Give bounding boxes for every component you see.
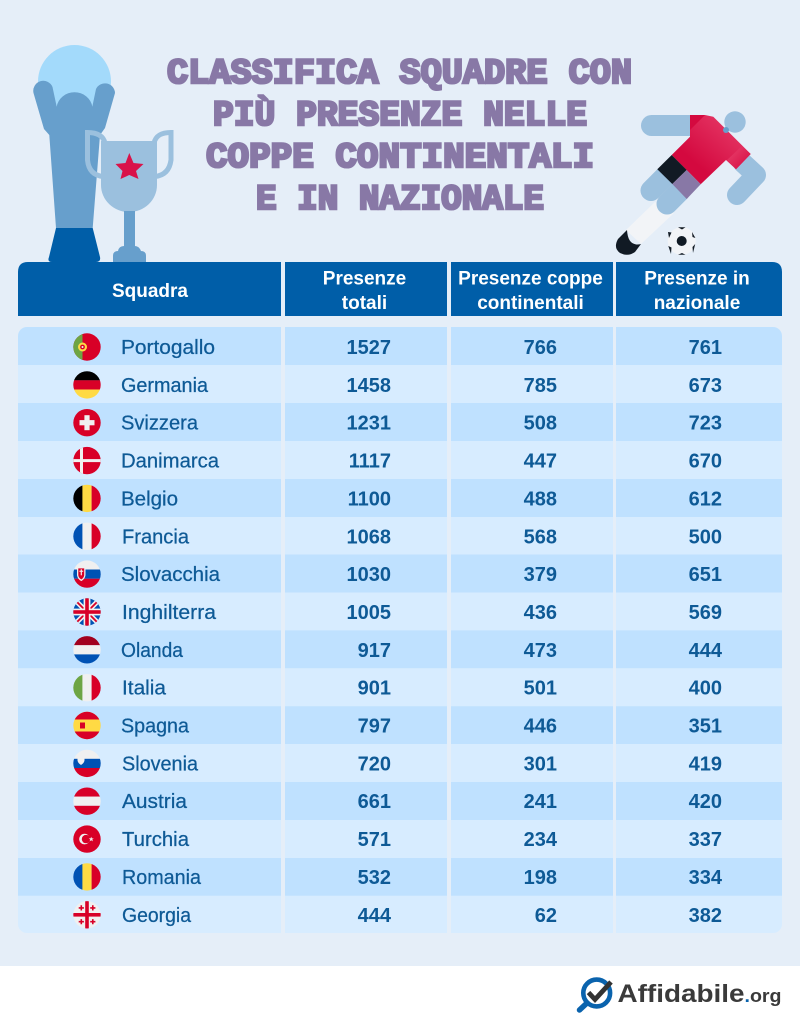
row: Georgia: 444 — [358, 905, 392, 927]
row: Spagna: 797 — [358, 716, 391, 738]
row: Spagna: Spagna — [121, 716, 190, 738]
row: Germania: 785 — [524, 375, 557, 397]
row: Belgio: 1100 — [348, 488, 391, 510]
row: Portogallo: Portogallo — [121, 337, 215, 359]
row: Francia: 500 — [689, 526, 722, 548]
row: Austria: Austria — [122, 791, 188, 813]
header: Presenze totali: Presenze — [323, 268, 406, 290]
row: Spagna: 351 — [689, 716, 722, 738]
row: Danimarca — [73, 447, 722, 475]
row: Turchia — [73, 825, 722, 853]
row: Georgia: 382 — [689, 905, 722, 927]
row: Georgia — [73, 901, 722, 929]
row: Inghilterra — [73, 598, 722, 626]
row: Germania: Germania — [121, 375, 209, 397]
row: Italia: Italia — [122, 678, 167, 700]
title: CLASSIFICA SQUADRE CON — [167, 54, 632, 94]
row: Turchia: Turchia — [122, 829, 190, 851]
row: Romania: Romania — [122, 867, 202, 889]
row: Turchia: 234 — [524, 829, 558, 851]
table rows background — [18, 327, 782, 934]
row: Belgio: 612 — [689, 488, 722, 510]
row: Spagna: 446 — [524, 716, 557, 738]
title: E IN NAZIONALE — [256, 180, 544, 220]
row: Danimarca: 447 — [524, 450, 557, 472]
row: Austria: 420 — [689, 791, 722, 813]
row: Danimarca: 1117 — [349, 450, 391, 472]
icon: magnifier with check — [580, 980, 611, 1010]
icon: large trophy statue — [33, 45, 115, 262]
logo suffix: .org — [744, 986, 782, 1006]
row: Slovenia: 720 — [358, 753, 391, 775]
row: Slovacchia: 651 — [689, 564, 722, 586]
row: Inghilterra: Inghilterra — [122, 602, 217, 624]
header: Presenze coppe continentali: continentali — [477, 293, 584, 314]
row: Olanda: Olanda — [121, 640, 184, 662]
row: Svizzera — [73, 409, 722, 437]
row: Inghilterra: 436 — [524, 602, 557, 624]
row: Francia: 568 — [524, 526, 557, 548]
row: Portogallo — [73, 333, 722, 361]
row: Slovacchia: Slovacchia — [121, 564, 221, 586]
icon: soccer ball — [668, 227, 696, 255]
row: Slovenia: 419 — [689, 753, 722, 775]
row: Belgio — [73, 484, 722, 512]
row: Francia: Francia — [122, 526, 190, 548]
row: Spagna — [73, 712, 722, 740]
row: Olanda — [73, 636, 723, 664]
row: Austria — [73, 787, 722, 815]
header: Squadra: Squadra — [112, 281, 188, 302]
row: Turchia: 571 — [358, 829, 391, 851]
row: Italia: 901 — [358, 678, 391, 700]
row: Olanda: 917 — [358, 640, 391, 662]
row: Svizzera: Svizzera — [121, 413, 199, 435]
row: Olanda: 444 — [689, 640, 723, 662]
row: Germania: 1458 — [346, 375, 391, 397]
row: Austria: 661 — [358, 791, 391, 813]
row: Georgia: 62 — [535, 905, 557, 927]
row: Belgio: 488 — [524, 488, 557, 510]
row: Francia: 1068 — [346, 526, 391, 548]
row: Slovacchia: 379 — [524, 564, 557, 586]
title — [167, 54, 632, 220]
title: PIÙ PRESENZE NELLE — [213, 95, 587, 136]
header: Presenze coppe continentali: Presenze coppe — [458, 268, 603, 290]
row: Danimarca: 670 — [689, 450, 722, 472]
row: Romania: 334 — [689, 867, 723, 889]
row: Slovacchia — [73, 560, 722, 588]
row: Georgia: Georgia — [122, 905, 192, 927]
row: Slovenia: 301 — [524, 753, 557, 775]
row: Germania — [73, 371, 722, 399]
row: Germania: 673 — [689, 375, 722, 397]
row: Portogallo: 766 — [524, 337, 557, 359]
row: Romania: 532 — [358, 867, 391, 889]
row: Portogallo: 761 — [689, 337, 722, 359]
header: Presenze in nazionale: Presenze in — [644, 268, 750, 290]
row: Slovenia — [73, 749, 722, 778]
row: Portogallo: 1527 — [346, 337, 391, 359]
row: Danimarca: Danimarca — [121, 450, 220, 472]
row: Inghilterra: 1005 — [346, 602, 391, 624]
logo wordmark: Affidabile — [618, 980, 745, 1008]
row: Belgio: Belgio — [121, 488, 178, 510]
row: Olanda: 473 — [524, 640, 557, 662]
row: Francia — [73, 522, 722, 550]
row: Italia: 400 — [689, 678, 722, 700]
row: Svizzera: 1231 — [346, 413, 391, 435]
row: Italia — [73, 674, 722, 702]
row: Turchia: 337 — [689, 829, 722, 851]
icon: football player — [616, 111, 756, 255]
logo: Affidabile.org — [580, 980, 782, 1010]
title: COPPE CONTINENTALI — [206, 138, 594, 178]
header: Presenze in nazionale: nazionale — [654, 293, 740, 314]
icon: small cup with star — [88, 132, 171, 262]
row: Austria: 241 — [524, 791, 557, 813]
row: Italia: 501 — [524, 678, 557, 700]
row: Slovacchia: 1030 — [346, 564, 391, 586]
table header — [18, 262, 782, 316]
row: Svizzera: 508 — [524, 413, 557, 435]
row: Svizzera: 723 — [689, 413, 722, 435]
row: Slovenia: Slovenia — [122, 753, 199, 775]
row: Romania: 198 — [524, 867, 557, 889]
row: Inghilterra: 569 — [689, 602, 722, 624]
row: Romania — [73, 863, 723, 891]
header: Presenze totali: totali — [342, 293, 387, 314]
